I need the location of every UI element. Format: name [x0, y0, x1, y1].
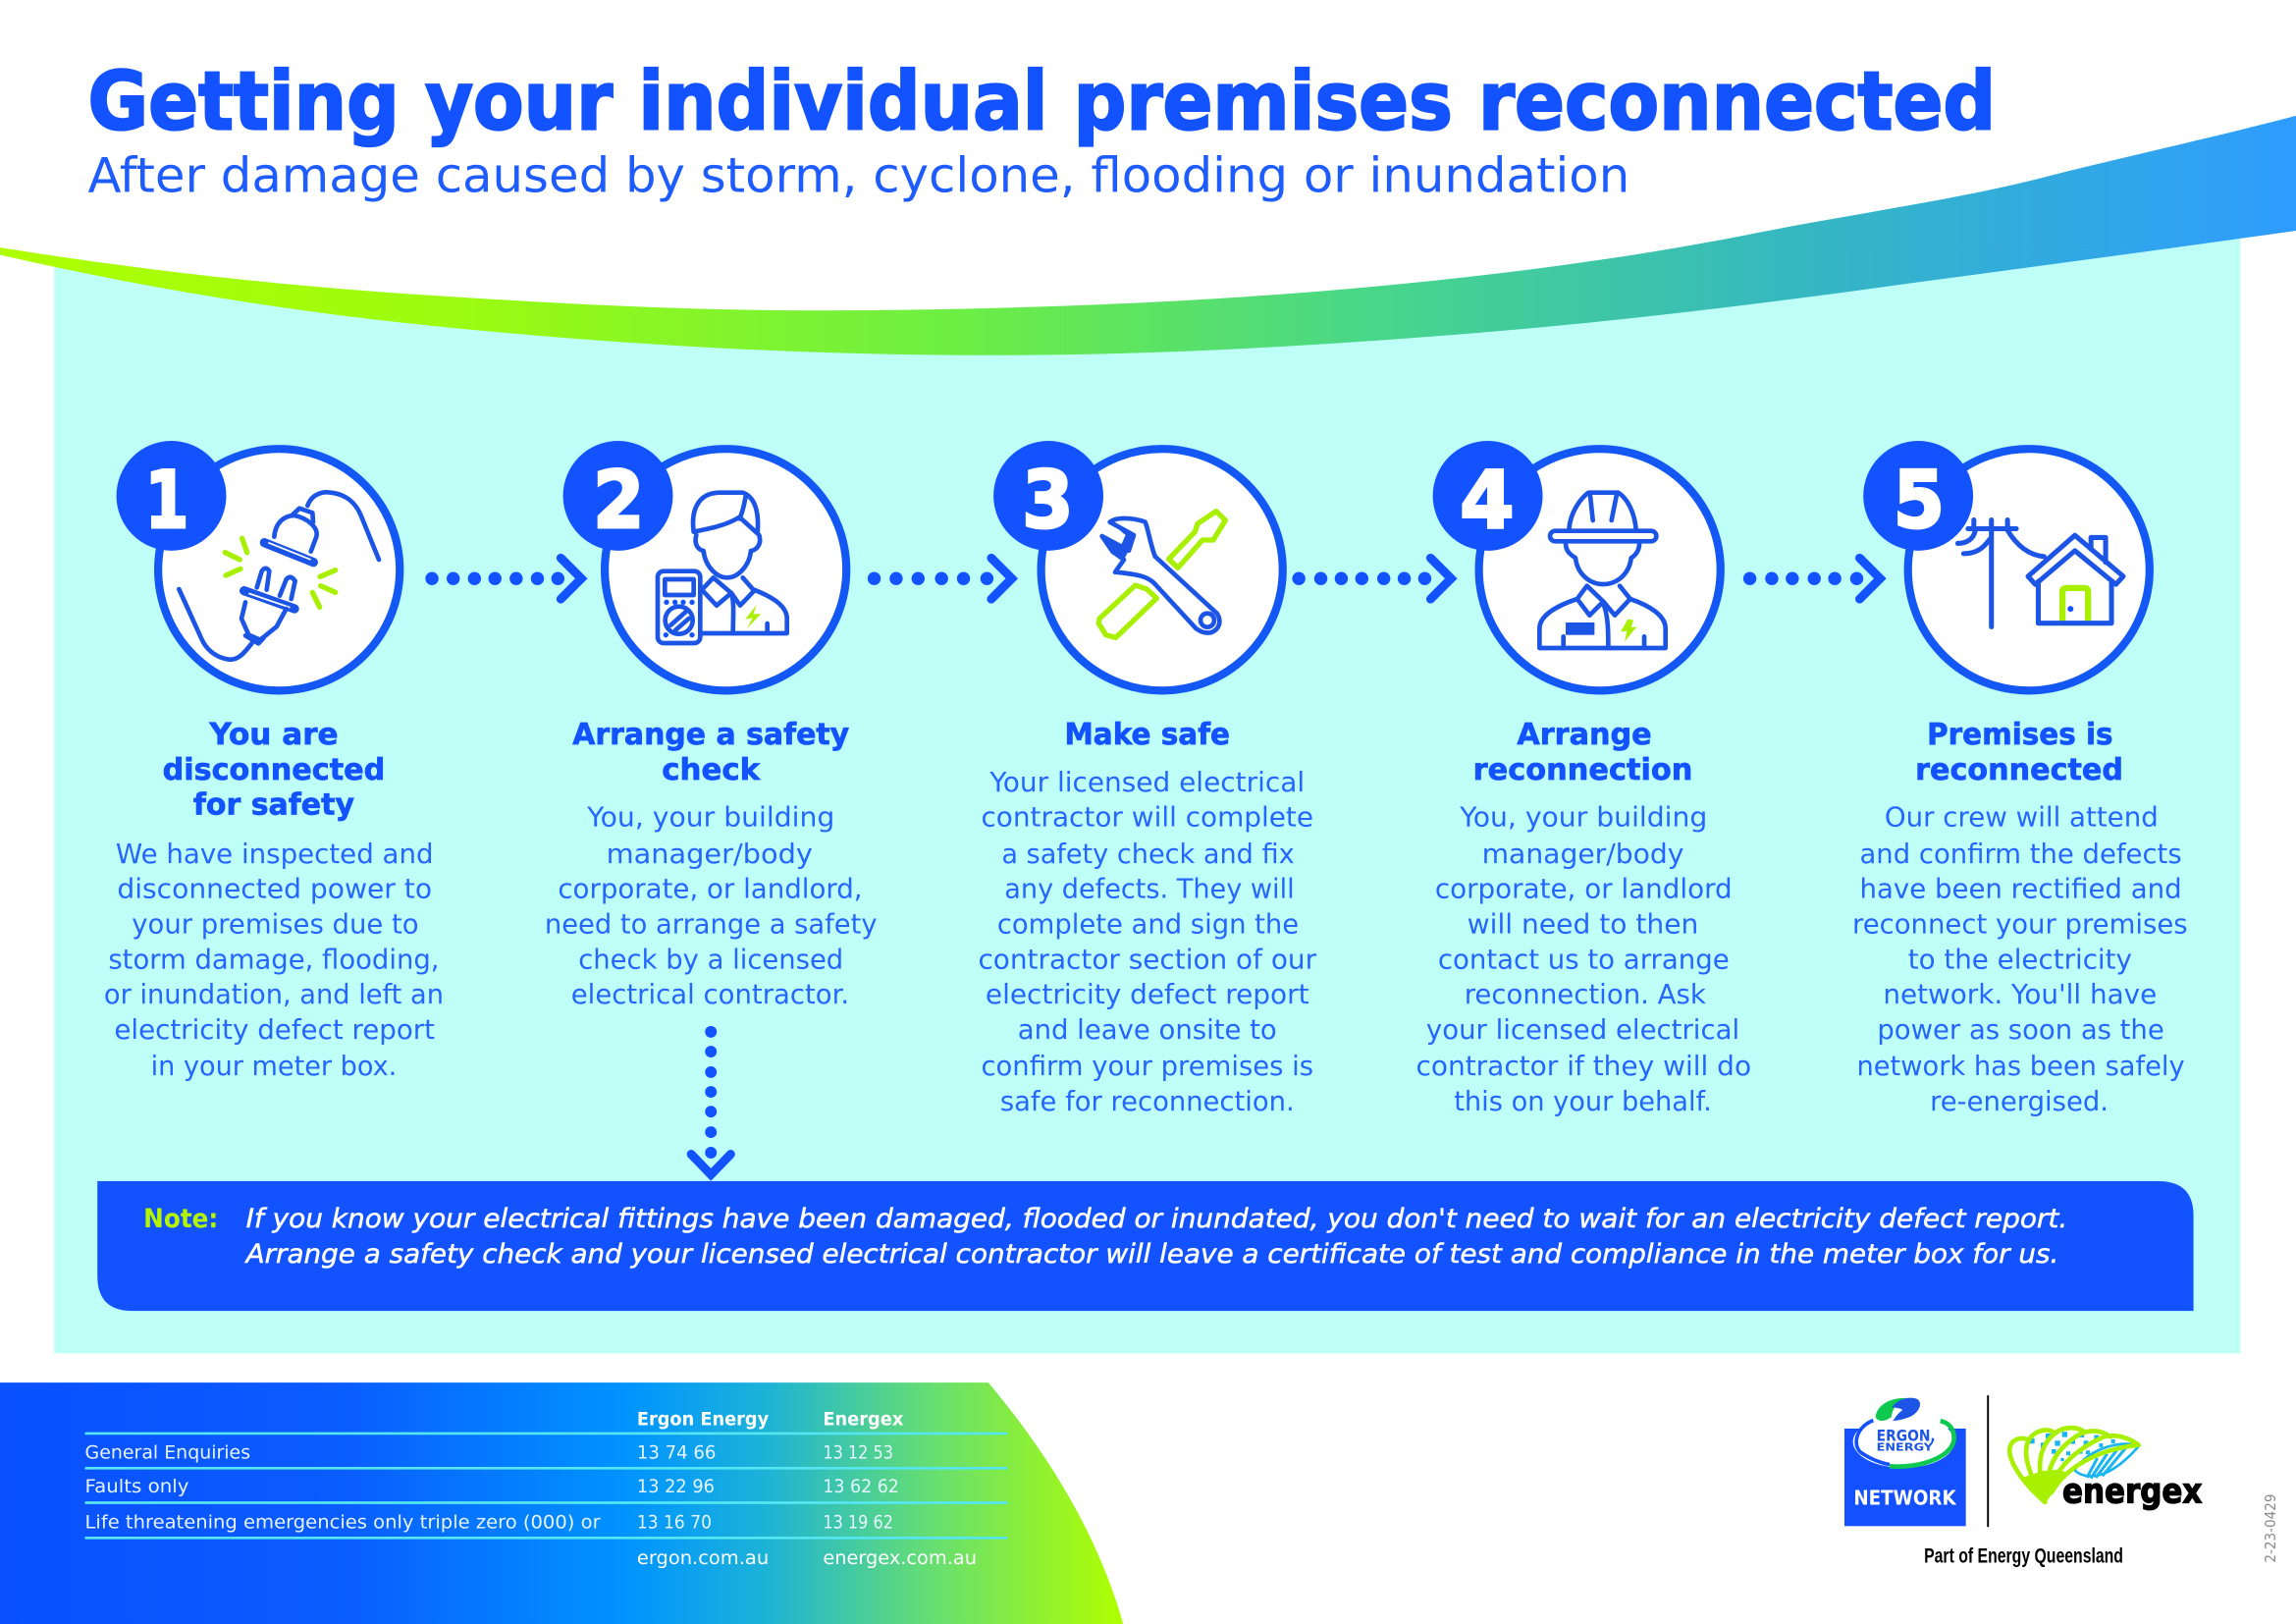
- step 4 heading: reconnection: [1473, 753, 1692, 787]
- step 4 body: contractor if they will do: [1415, 1050, 1751, 1082]
- footer contact panel: Energex: [823, 1409, 903, 1430]
- number badge 3: [993, 441, 1103, 551]
- step 4 body: corporate, or landlord: [1435, 873, 1733, 905]
- step 2 body: need to arrange a safety: [545, 908, 878, 941]
- step 3 body: safe for reconnection.: [1000, 1085, 1295, 1117]
- step 4 body: You, your building: [1459, 801, 1707, 834]
- step 3 body: complete and sign the: [997, 908, 1299, 941]
- logo: Ergon Energy Network: ENERGY: [1877, 1442, 1934, 1454]
- step 5 body: Our crew will attend: [1885, 801, 2159, 834]
- panel: pale aqua background: [54, 146, 2240, 1353]
- step 1 heading: disconnected: [163, 753, 385, 787]
- number badge 5: [1863, 441, 1973, 551]
- footer contact panel: Life threatening emergencies only triple zero (000) or: [85, 1513, 601, 1534]
- step 5 body: re-energised.: [1930, 1085, 2109, 1117]
- step 2 body: electrical contractor.: [571, 978, 849, 1010]
- number badge 4: [1433, 441, 1543, 551]
- step 4 body: reconnection. Ask: [1465, 978, 1706, 1010]
- footer contact panel: 13 19 62: [823, 1513, 893, 1534]
- step 1 heading: for safety: [193, 788, 354, 823]
- step 4 body: your licensed electrical: [1426, 1013, 1739, 1046]
- text: part of Energy Queensland: Part of Energy Queensland: [1924, 1545, 2123, 1568]
- step 1 body: electricity defect report: [114, 1013, 435, 1046]
- step 1 heading: [163, 718, 385, 823]
- white header area: [0, 0, 2296, 310]
- step 5 body: network. You'll have: [1883, 978, 2157, 1010]
- step 3 body: a safety check and fix: [1001, 838, 1295, 870]
- number badge 4: 4: [1460, 454, 1514, 546]
- step 3 body: contractor will complete: [981, 801, 1313, 834]
- number badge 3: 3: [1022, 454, 1073, 546]
- icon: electrician with multimeter: [605, 449, 846, 690]
- step 1 body: We have inspected and: [116, 838, 434, 870]
- footer contact panel: Ergon Energy: [637, 1409, 769, 1430]
- step 5 body: to the electricity: [1908, 943, 2132, 975]
- step 3 heading: Make safe: [1064, 718, 1230, 752]
- footer contact panel: energex.com.au: [823, 1548, 977, 1569]
- step 4 heading: Arrange: [1517, 718, 1652, 752]
- step 4 body: contact us to arrange: [1438, 943, 1730, 975]
- step 2 heading: check: [662, 753, 761, 787]
- footer contact panel: General Enquiries: [85, 1443, 250, 1464]
- arrow 3 to 4: [1292, 558, 1451, 599]
- arrow 4 to 5: [1743, 558, 1880, 599]
- icon: unplugged cable: [158, 449, 400, 690]
- footer contact panel: 13 22 96: [637, 1477, 715, 1497]
- step 3 body: any defects. They will: [1004, 873, 1295, 905]
- callout: note: Note:: [143, 1204, 218, 1234]
- step 2 heading: [572, 718, 849, 787]
- step 5 body: [1852, 801, 2188, 1117]
- icon: wrench and screwdriver: [1041, 449, 1283, 690]
- logo: Ergon Energy Network: ERGON,: [1877, 1426, 1936, 1444]
- step 3 body: and leave onsite to: [1018, 1013, 1277, 1046]
- icon: power pole and house: [1908, 449, 2150, 690]
- step 4 body: this on your behalf.: [1454, 1085, 1712, 1117]
- step 1 body: in your meter box.: [151, 1050, 397, 1082]
- document code: 2-23-0429: [2262, 1494, 2279, 1563]
- step 3 body: confirm your premises is: [981, 1050, 1313, 1082]
- callout: note: [97, 1181, 2194, 1311]
- step 1 body: disconnected power to: [117, 873, 432, 905]
- logo: Energex: energex: [2062, 1473, 2202, 1512]
- step 1 body: storm damage, flooding,: [108, 943, 440, 975]
- step 4 body: [1415, 801, 1751, 1117]
- step 3 body: [978, 766, 1317, 1117]
- step 3 body: contractor section of our: [978, 943, 1317, 975]
- footer contact panel: 13 16 70: [637, 1513, 712, 1534]
- footer contact panel: 13 74 66: [637, 1443, 716, 1464]
- step 5 heading: reconnected: [1915, 753, 2123, 787]
- number badge 2: 2: [593, 454, 644, 546]
- footer contact panel: 13 62 62: [823, 1477, 899, 1497]
- step 5 body: have been rectified and: [1859, 873, 2182, 905]
- step 1 heading: You are: [208, 718, 339, 752]
- logo: Ergon Energy Network: NETWORK: [1853, 1486, 1957, 1509]
- step 2 body: You, your building: [586, 801, 834, 834]
- step 2 body: check by a licensed: [578, 943, 843, 975]
- step 2 body: corporate, or landlord,: [558, 873, 863, 905]
- arrow down to note: [691, 1026, 730, 1174]
- step 5 body: and confirm the defects: [1859, 838, 2182, 870]
- step 3: [978, 441, 1317, 1117]
- step 1 body: [104, 838, 444, 1082]
- step 5 heading: Premises is: [1927, 718, 2113, 752]
- footer contact panel: ergon.com.au: [637, 1548, 769, 1569]
- step 4 heading: [1473, 718, 1692, 787]
- step 1: [104, 441, 444, 1082]
- footer contact panel: Faults only: [85, 1477, 188, 1497]
- logo: Ergon Energy Network: [1844, 1398, 1966, 1526]
- step 2: [545, 441, 878, 1174]
- step 5 heading: [1915, 718, 2123, 787]
- number badge 1: [117, 441, 226, 551]
- icon: line worker with hard hat: [1479, 449, 1721, 690]
- step 2 body: manager/body: [607, 838, 813, 870]
- swoosh band: [0, 116, 2296, 355]
- subtitle: After damage caused by storm, cyclone, flooding or inundation: [88, 146, 1629, 203]
- footer contact panel: 13 12 53: [823, 1443, 893, 1464]
- number badge 5: 5: [1894, 454, 1945, 546]
- step 4 body: will need to then: [1468, 908, 1698, 941]
- title: Getting your individual premises reconnected: [88, 55, 1996, 148]
- callout: note: If you know your electrical fittings have been damaged, flooded or inundated, you don't need to wait for an electricity defect report.: [246, 1204, 2067, 1234]
- step 5: [1852, 441, 2188, 1117]
- step 5 body: reconnect your premises: [1852, 908, 2188, 941]
- arrow 1 to 2: [425, 558, 581, 599]
- step 2 heading: Arrange a safety: [572, 718, 849, 752]
- number badge 2: [563, 441, 672, 551]
- step 5 body: power as soon as the: [1877, 1013, 2164, 1046]
- step 5 body: network has been safely: [1856, 1050, 2185, 1082]
- step 1 body: or inundation, and left an: [104, 978, 444, 1010]
- number badge 1: 1: [145, 454, 188, 546]
- callout: note: Arrange a safety check and your licensed electrical contractor will leave a certificate of test and compliance in the meter box for us.: [244, 1239, 2058, 1270]
- step 3 body: electricity defect report: [986, 978, 1309, 1010]
- step 4: [1415, 441, 1751, 1117]
- logo: Energex: [2009, 1428, 2202, 1512]
- step 3 body: Your licensed electrical: [988, 766, 1305, 798]
- step 1 body: your premises due to: [132, 908, 419, 941]
- step 4 body: manager/body: [1482, 838, 1683, 870]
- logo divider: [1987, 1395, 1989, 1527]
- arrow 2 to 3: [868, 558, 1012, 599]
- step 2 body: [545, 801, 878, 1010]
- footer contact panel: [0, 1382, 1123, 1624]
